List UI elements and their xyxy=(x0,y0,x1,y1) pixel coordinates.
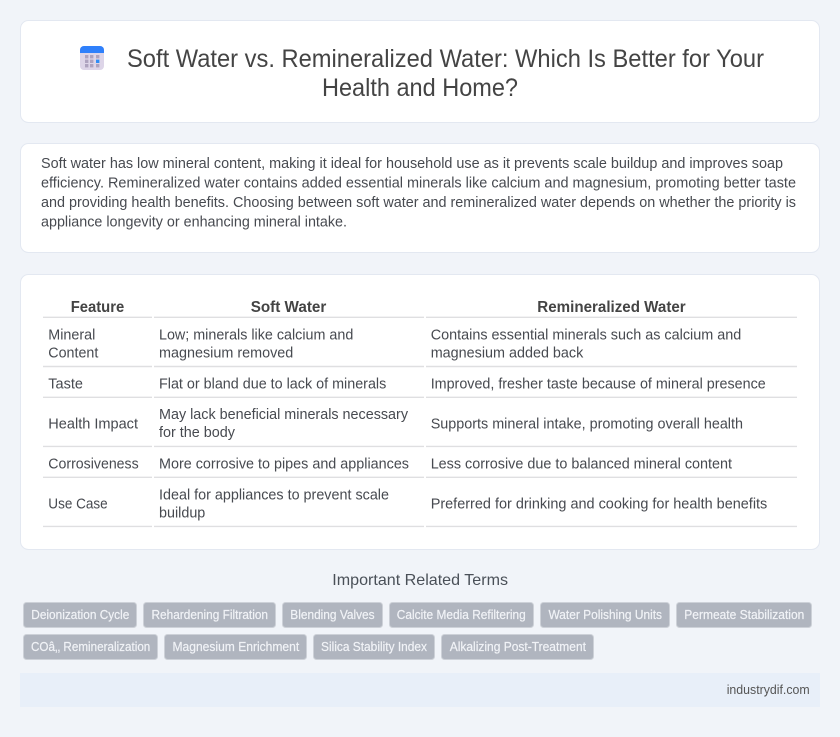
panel: summary paragraph: appliance longevity or enhancing mineral intake. xyxy=(41,214,347,230)
title: Soft Water vs. Remineralized Water: Which Is Better for Your xyxy=(127,45,764,73)
row: mineral content: Content xyxy=(48,345,98,361)
panel: comparison table xyxy=(20,274,820,550)
tag: Magnesium Enrichment xyxy=(172,640,300,654)
row: health impact xyxy=(43,407,797,446)
row: use case: Use Case xyxy=(48,496,108,512)
tag xyxy=(282,602,382,628)
row: health impact: Supports mineral intake, promoting overall health xyxy=(431,416,743,432)
row: corrosiveness: More corrosive to pipes and appliances xyxy=(159,456,409,472)
tag xyxy=(442,634,594,660)
title xyxy=(127,45,764,102)
table header row: Remineralized Water xyxy=(537,299,686,316)
row: taste: Flat or bland due to lack of minerals xyxy=(159,376,386,392)
table header row xyxy=(43,299,797,317)
row: mineral content: Contains essential minerals such as calcium and xyxy=(431,327,741,343)
row: taste: Improved, fresher taste because of mineral presence xyxy=(431,376,766,392)
row: mineral content: magnesium added back xyxy=(431,345,584,361)
tag xyxy=(24,634,158,660)
tag: Water Polishing Units xyxy=(548,608,662,622)
tag: Alkalizing Post-Treatment xyxy=(450,640,586,654)
panel: summary paragraph: Soft water has low mineral content, making it ideal for household use as it prevents scale buildup and improves soap xyxy=(41,156,783,172)
tag xyxy=(164,634,306,660)
header panel xyxy=(20,20,820,122)
row: use case xyxy=(43,487,797,526)
row: health impact: May lack beneficial minerals necessary xyxy=(159,407,409,423)
tag: Rehardening Filtration xyxy=(152,608,268,622)
row: taste: Taste xyxy=(48,376,83,392)
tag: Blending Valves xyxy=(290,608,375,622)
row: corrosiveness: Corrosiveness xyxy=(48,456,139,472)
table header row: Soft Water xyxy=(251,299,326,316)
footer xyxy=(20,673,820,707)
tag xyxy=(540,602,670,628)
panel: summary paragraph xyxy=(20,144,820,252)
tag xyxy=(390,602,534,628)
row: mineral content: Low; minerals like calcium and xyxy=(159,327,353,343)
tag: Silica Stability Index xyxy=(321,640,428,654)
table header row: Feature xyxy=(71,299,124,316)
tags: related terms xyxy=(24,602,812,660)
tag: COâ‚‚ Remineralization xyxy=(31,640,150,654)
title: Health and Home? xyxy=(322,74,518,102)
row: corrosiveness: Less corrosive due to balanced mineral content xyxy=(431,456,732,472)
tag: Deionization Cycle xyxy=(31,608,129,622)
row: mineral content xyxy=(43,327,797,366)
row: corrosiveness xyxy=(43,456,797,477)
panel: summary paragraph: and providing health benefits. Choosing between soft water and remineralized water depends on whether the priority is xyxy=(41,195,796,211)
row: mineral content: Mineral xyxy=(48,327,95,343)
row: use case: Preferred for drinking and cooking for health benefits xyxy=(431,496,767,512)
row: health impact: for the body xyxy=(159,425,236,441)
tag xyxy=(144,602,276,628)
tag: Calcite Media Refiltering xyxy=(397,608,526,622)
row: mineral content: magnesium removed xyxy=(159,345,293,361)
icon: calendar xyxy=(80,46,104,70)
tag xyxy=(676,602,812,628)
heading: important related terms: Important Related Terms xyxy=(332,572,508,589)
panel: summary paragraph: efficiency. Remineralized water contains added essential minerals like calcium and magnesium, promoting better taste xyxy=(41,176,796,192)
tag xyxy=(24,602,136,628)
footer: industrydif.com xyxy=(727,683,810,697)
row: use case: buildup xyxy=(159,505,205,521)
row: use case: Ideal for appliances to prevent scale xyxy=(159,487,389,503)
tag: Permeate Stabilization xyxy=(684,608,804,622)
row: taste xyxy=(43,376,797,397)
row: health impact: Health Impact xyxy=(48,416,138,432)
tag xyxy=(314,634,434,660)
